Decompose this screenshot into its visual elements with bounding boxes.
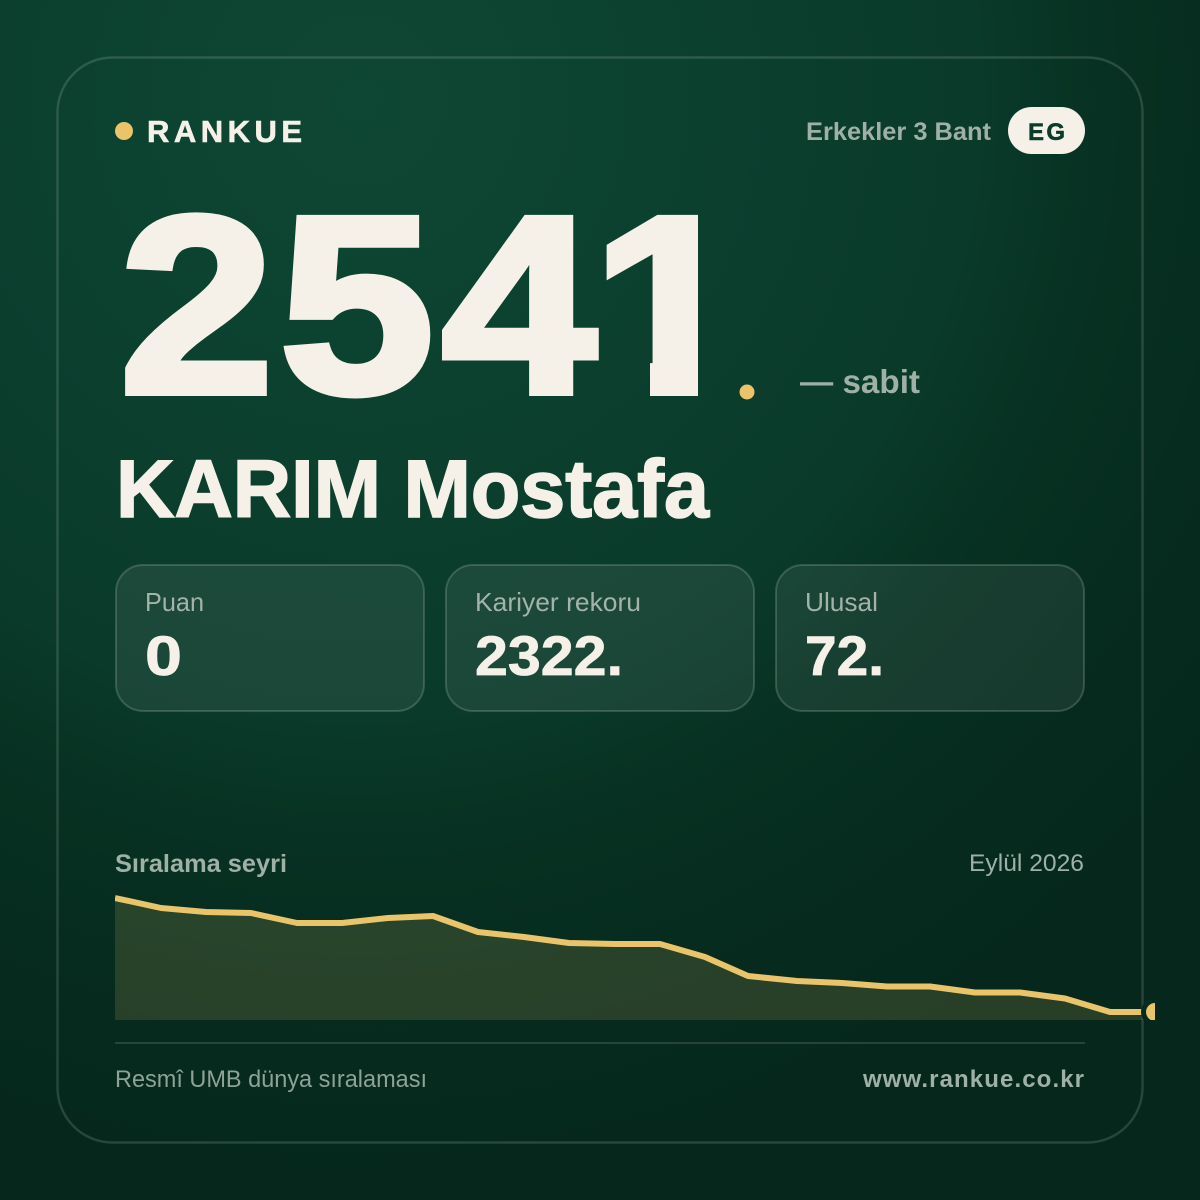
stat card: puan: Puan	[145, 587, 204, 617]
stat card: kariyer rekoru: 2322.	[475, 624, 623, 687]
chart end marker	[1141, 1003, 1155, 1020]
country badge: EG	[1028, 119, 1065, 146]
chart title: Sıralama seyri	[115, 850, 287, 878]
brand logo	[115, 114, 302, 149]
accent dot	[740, 384, 754, 400]
icon: brand dot	[115, 122, 133, 140]
ranking line chart	[115, 898, 1166, 1024]
chart area	[115, 898, 1155, 1020]
stat card: ulusal	[776, 565, 1084, 711]
chart date: Eylül 2026	[969, 850, 1084, 877]
country badge	[1008, 107, 1085, 154]
player name: KARIM Mostafa	[116, 444, 710, 535]
footer website: www.rankue.co.kr	[862, 1066, 1084, 1093]
brand name: RANKUE	[147, 114, 302, 149]
footer source: Resmî UMB dünya sıralaması	[115, 1066, 427, 1093]
stat card: puan	[116, 565, 424, 711]
category label: Erkekler 3 Bant	[806, 118, 992, 146]
footer divider	[115, 1042, 1085, 1044]
ranking number: 2541	[119, 164, 746, 447]
stat card: puan: 0	[145, 624, 182, 687]
stat card: ulusal: Ulusal	[805, 587, 878, 617]
rank change: — sabit	[800, 363, 920, 400]
stat card: kariyer rekoru: Kariyer rekoru	[475, 587, 641, 617]
stat card: ulusal: 72.	[805, 624, 884, 687]
stat card: kariyer rekoru	[446, 565, 754, 711]
chart line	[115, 898, 1155, 1012]
